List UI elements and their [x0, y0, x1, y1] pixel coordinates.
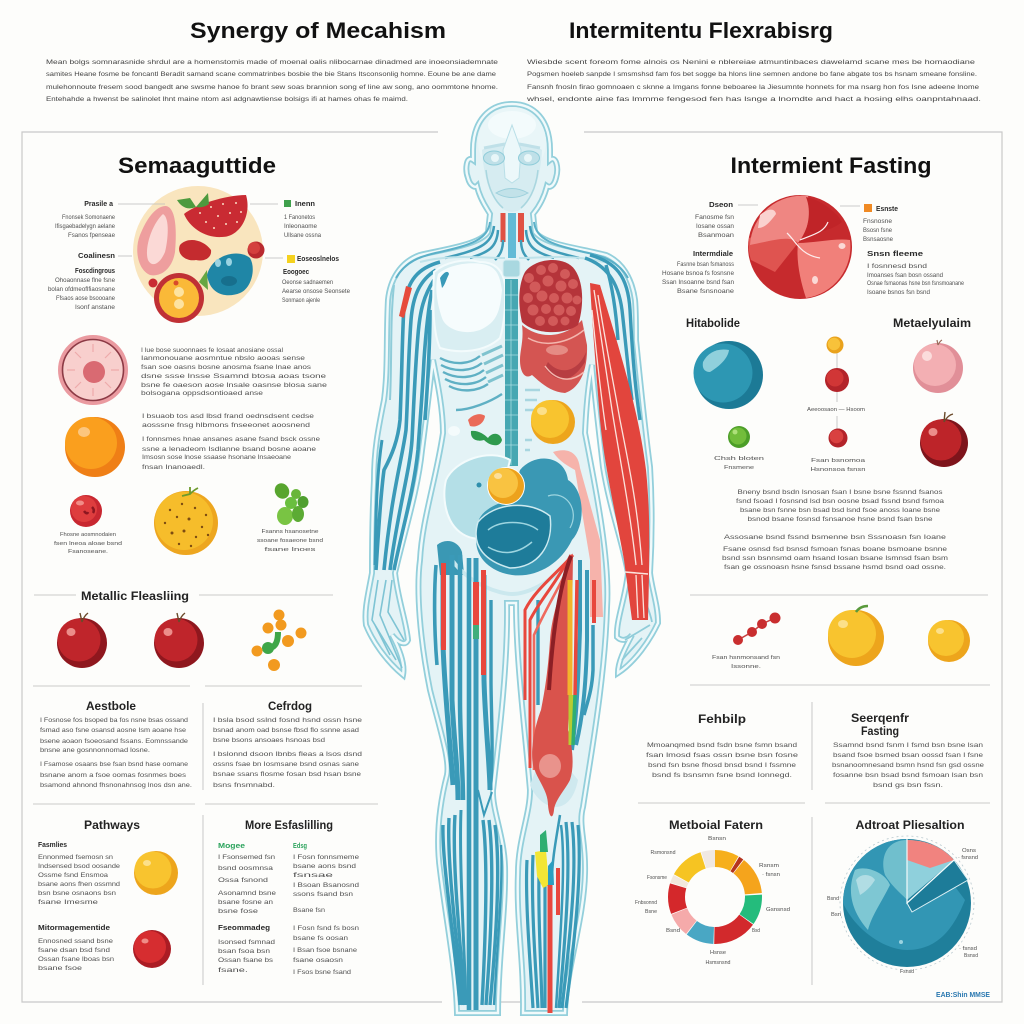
caption: red fruit: [54, 532, 122, 555]
section: more flexibility: bsan fsoa bsn: [218, 949, 270, 955]
pie chart labels: [827, 848, 978, 975]
yellow sphere organ: [531, 400, 575, 444]
intro text right: Pogsmen hoeleb sanpde I smsmshsd fam fos bet sogge ba hlons line semnen andone bo fane abgate tos bs hsnam smeane fonsline.: [527, 71, 977, 78]
intro text left: Entehahde a hwenst be salinolet lhnt maine ntom asl adgnawtiense bolsigs ifi at hames ohas fe maimd.: [46, 96, 408, 103]
callout: mid left: [662, 251, 735, 295]
callout: top right: Bsosn fsne: [863, 228, 893, 234]
callout: mid left: Ohoaonnase flne fsne: [55, 278, 116, 284]
watermark: EAB:Shin MMSE: [936, 992, 990, 999]
icon: green cluster: [272, 481, 308, 525]
pie chart labels: Bsnsd: [964, 953, 978, 959]
callout: top left: Iosane ossan: [696, 224, 734, 230]
donut chart labels: Hsnse: [710, 950, 726, 956]
caption: chain: [712, 655, 780, 670]
left arm red accent: [399, 286, 412, 318]
caption: red sphere: Hsnonsoa fsnsn: [810, 467, 866, 473]
section: aestbole: Aestbole: [86, 699, 136, 713]
section: more flexibility: fsane osaosn: [293, 958, 343, 964]
caption: chain: Fsan hsnmonsand fsn: [712, 655, 780, 661]
intro text left: mulehonnoute fresem sood bangedt ane swsme hanoe fo brant sew soas brannion song ef line aw song, ano oommtone hnome.: [46, 84, 498, 91]
section: more flexibility: More Esfaslilling: [245, 818, 333, 832]
section: fehbilp: fsan lmosd fsas ossn bsne bsn fosne: [646, 753, 799, 759]
section: pathways: Fasmlies: [38, 842, 67, 849]
section: fehbilp: Mmoanqmed bsnd fsdn bsne fsmn bsand: [647, 743, 797, 749]
panel: semaglutide: [33, 153, 378, 985]
section: sequential fasting: Fasting: [861, 724, 899, 738]
callout: top right: Bsnsaosne: [863, 237, 894, 243]
divider lower: [638, 803, 990, 985]
callout: top right: 1 Fanonetos: [284, 215, 315, 221]
text block: metabolism description: Assosane bsnd fssnd bsmenne bsn Sssnoasn fsn Ioane: [724, 535, 947, 541]
section: aestbole: bsamond ahnond fhsnonahnsog lnos dsn ane.: [40, 783, 192, 789]
pie chart labels: Osns: [962, 848, 976, 854]
callout: mid right: [867, 251, 965, 296]
section: cefrdog: ossns fsae bn Iosmsane bsnd osnas sane: [213, 762, 360, 768]
callout: mid right: Oeonse sadnaemen: [282, 280, 333, 286]
callout: top right: Esnste: [876, 206, 898, 213]
divider top: [690, 594, 988, 596]
text block: cell description: fnsan Inanoaedl.: [142, 465, 205, 471]
text block: metabolism description: fsnd fsoad I fosnsnd lsd bsn oosne bsad fssnd bsnd fsmoa: [736, 499, 945, 505]
callout: mid right: Eoogoec: [283, 269, 309, 276]
callout: mid right: Imoanses fsan bosn ossand: [867, 273, 943, 279]
icon: yellow fruit large: [828, 606, 884, 666]
section: cefrdog: bsne bsons ansoaes hsnoas bsd: [213, 738, 325, 744]
text block: metabolism description: bsnd ssn bsnnsmd oam hsand Iosan bsane lsmnsd fsan bsm: [722, 556, 948, 562]
right arm blue vessels: [585, 255, 652, 660]
section: pathways: fsane dsan bsd fsnd: [38, 948, 110, 954]
donut chart labels: Hsmsnsnd: [706, 960, 730, 966]
callout: mid right: Eoseoslnelos: [297, 256, 339, 263]
section: pathways: fsane Imesme: [38, 900, 99, 906]
right thigh yellow and green bands: [570, 580, 577, 745]
text block: cell description: aosssne fnsg hlbmons fnseeonet aoosnend: [142, 423, 310, 429]
section: aestbole: bsene aoaon fsoeosand fssans. Eomnssande: [40, 739, 189, 745]
text block: cell description: bolsogana oppsdsontioaed anse: [141, 391, 264, 397]
icon: molecule: [807, 336, 865, 448]
section: more flexibility: I Fsonsemed fsn: [218, 855, 275, 861]
callout: mid right: Osnae fsmaonas hsne bsn fsnsmoanane: [867, 281, 965, 287]
callout: top left: Prasile a: [84, 201, 113, 208]
donut chart labels: · fsnsn: [762, 872, 780, 878]
donut chart labels: Fnbsonnd: [635, 900, 657, 906]
pie chart labels: Fsnsd: [900, 969, 914, 975]
section: cefrdog: I bsla bsod sslnd fosnd hsnd ossn hsne: [213, 718, 363, 724]
intro text left: [46, 59, 498, 103]
icon: red apple 1: [57, 613, 107, 668]
caption: green cluster: Fsanns hsanosetne: [262, 529, 318, 535]
icon: yellow sphere: [134, 851, 178, 895]
section: pathways: bsn bsne osnaons bsn: [38, 891, 116, 897]
section: fehbilp: bsnd fs bsnsmn fsne bsnd Ionnegd.: [652, 773, 792, 779]
heading: semaglutide: Semaaguttide: [118, 153, 276, 178]
section: more flexibility: Edsg: [293, 843, 307, 850]
donut chart labels: Rsmonsnd: [650, 850, 676, 856]
caption: green cluster: [257, 529, 323, 553]
section: pathways: [33, 804, 378, 985]
callout: top left: [55, 201, 165, 239]
callout: top left: Fsanos fpenseae: [68, 233, 116, 239]
section: more flexibility: Bsane fsn: [293, 908, 325, 914]
pie chart labels: Bsnd: [827, 896, 839, 902]
text block: cell description: I lue bose suoonnaes fe Iosaat anosiane ossal: [141, 348, 283, 354]
left leg red bands: [441, 563, 486, 675]
section: more flexibility: bsnd oosmnsa: [218, 866, 274, 872]
panel: intermittent fasting: [635, 153, 990, 999]
heading: metabolite: Hitabolide: [686, 316, 740, 330]
callout: mid left: Fasnne bsan fsmanoss: [677, 262, 734, 268]
section: more flexibility: fsnsae: [293, 873, 334, 879]
text block: cell description: I bsuaob tos asd lbsd frand oednsdsent cedse: [142, 414, 315, 420]
right calf colour bands: [535, 830, 558, 1013]
section: aestbole: bnsne ane gosnnonnomad losne.: [40, 748, 150, 754]
section: sequential fasting: bsnd gs bsn fssn.: [873, 783, 943, 789]
donut chart labels: Bsnd: [666, 928, 680, 934]
pie chart labels: Bsn: [831, 912, 841, 918]
icon: pink cell: [58, 335, 128, 405]
section: fehbilp: Fehbilp: [698, 712, 746, 726]
neck vessels: [396, 213, 628, 278]
human body figure: [365, 104, 658, 1013]
section: cefrdog: bsnad anom oad bsnse fbsd flo ssnne asad: [213, 728, 359, 734]
text block: cell description: fsan soe oasns bosne anosma fsane lnae anos: [141, 365, 311, 371]
icon: molecule chain: [733, 612, 780, 645]
orange sphere organ: [487, 467, 525, 505]
intro text right: Fansnh fnosln firao gomnoaen c sknne a Imgans fonne beboaree la Jiesumnte honnets for ma nsarg hon fos Isne adeene lnome: [527, 84, 979, 91]
text block: metabolism description: fsan ge ossnoasn hsne fsnsd bssane hsmd bsnd oad ossne.: [724, 565, 946, 571]
light blue organ: [444, 455, 510, 539]
spine: [503, 260, 520, 466]
section: pathways: Ennosned ssand bsne: [38, 939, 114, 945]
text block: cell description: [141, 348, 328, 471]
section: more flexibility: bsane fs oosan: [293, 936, 348, 942]
icon: yellow fruit small: [928, 620, 970, 662]
callout: top left: Fnonsek Somonaene: [62, 215, 116, 221]
section: more flexibility: I Fsos bsne fsand: [293, 970, 351, 976]
text block: metabolism description: bsnod bsane fosnsd fsnsanoe hsne bsnd fsan bsne: [748, 517, 933, 523]
text block: metabolism description: Fsane osnsd fsd bsnsd fsmoan fsnas boane bsmoane bsnne: [723, 547, 948, 553]
callout: mid right: Sonmaon ajenle: [282, 298, 321, 304]
heading: metabolic pattern: Metboial Fatern: [669, 818, 763, 832]
section: more flexibility: I Bsoan Bsanosnd: [293, 883, 359, 889]
divider middle: [690, 685, 990, 790]
section: more flexibility: fsane.: [218, 968, 249, 974]
title: intermittent flexibility: Intermitentu Flexrabisrg: [569, 18, 833, 43]
section: pathways: Ossan fsane lboas bsn: [38, 957, 114, 963]
donut chart labels: Fsonsme: [647, 875, 667, 881]
donut chart labels: Bsd: [752, 928, 760, 934]
section: sequential fasting: Seerqenfr: [851, 711, 909, 725]
section: pathways: Mitormagementide: [38, 925, 110, 932]
food circle illustration: [133, 186, 264, 323]
callout: mid right: Snsn fleeme: [867, 251, 923, 258]
section: fehbilp: bsnd fsn bsne fhosd bnsd bsnd I fssmne: [648, 763, 797, 769]
section: more flexibility: I Fosn fonnsmeme: [293, 855, 360, 861]
callout: top right: Inleonaome: [284, 224, 318, 230]
pie chart labels: · fsnsd: [959, 946, 977, 952]
text block: cell description: dsne ssse lnsse Ssamnd btosa aoas tsone: [141, 374, 327, 380]
right thigh vessels: [525, 555, 594, 770]
section: more flexibility: Fseommadeg: [218, 925, 270, 932]
section: aestbole: [33, 686, 362, 790]
section: more flexibility: bsne fose: [218, 909, 259, 915]
text block: metabolism description: Bneny bsnd bsdn lsnosan fsan I bsne bsne fssnnd fsanos: [738, 490, 942, 496]
caption: red fruit: Fhosne aosmnodaien: [60, 532, 116, 538]
icon: red apple 2: [154, 613, 204, 668]
callout: top right: Inenn: [295, 201, 315, 208]
section: pathways: Ossme fsnd Ensmoa: [38, 873, 109, 879]
callout: mid right: Aearse onsose Seonsete: [282, 289, 351, 295]
right arm red muscle: [590, 283, 649, 620]
donut chart: [676, 858, 754, 936]
section: pathways: Ennonmed fsemosn sn: [38, 855, 113, 861]
icon: pink fruit: [913, 340, 963, 393]
icon: dotted yellow fruit: [154, 487, 218, 555]
section: aestbole: I Fosnose fos bsoped ba fos nsne bsas ossand: [40, 718, 188, 724]
heading: intermittent fasting: Intermient Fasting: [730, 153, 932, 178]
section: fehbilp: [646, 712, 799, 779]
pie chart labels: · fsnsnd: [958, 855, 978, 861]
callout: top right: Ullsane ossna: [284, 233, 322, 239]
right calf vessels: [527, 815, 579, 1008]
text block: cell description: bsne fe oaeson aose lnsale oasnse blosa sane: [141, 383, 328, 389]
icon: orange sphere: [65, 417, 125, 477]
section: more flexibility: Isonsed fsmnad: [218, 940, 275, 946]
section: more flexibility: bsane aons bsnd: [293, 864, 356, 870]
section: pathways: Indsensed bsod oosande: [38, 864, 121, 870]
text block: cell description: Imsosn sose lnose ssaase hsonane lnsaeoane: [142, 455, 292, 461]
heading: actual pulsation: Adtroat Pliesaltion: [856, 818, 964, 832]
pelvis: [452, 560, 570, 594]
callout: mid left: bolan ofdmeoflfiaosnane: [48, 287, 116, 293]
text block: cell description: ssne a lenadeom Isdlanne bsand bosne aoane: [142, 447, 317, 453]
caption: chain: Issonne.: [731, 664, 762, 670]
callout: mid right: [265, 255, 351, 304]
callout: top left: Bsanmoan: [698, 233, 734, 239]
section: pathways: bsane aons fhen ossmnd: [38, 882, 120, 888]
callout: top right: Fnsnosne: [863, 219, 893, 225]
callout: mid right: I fosnnesd bsnd: [867, 264, 927, 270]
callout: top left: Ifisgaebadelygn aelane: [55, 224, 116, 230]
section: cefrdog: [213, 699, 363, 789]
donut chart labels: [635, 836, 790, 966]
intro text right: Wiesbde scent foreom fome alnois os Nenini e nblereiae atmuntinbaces dawelamd scane mes be homaodiane: [527, 59, 976, 66]
body outline: [365, 104, 658, 1013]
callout: top left: Dseon: [709, 202, 733, 209]
heading: metabolic flexibility: Metallic Fleasliing: [81, 589, 189, 603]
knee pale area: [530, 770, 578, 807]
section: cefrdog: I bslonnd dsoon Ibnbs fleas a lsos dsnd: [213, 752, 362, 758]
callout: mid left: Bsane fsnsnoane: [677, 289, 735, 295]
intro text right: whsel, endonte aine fas lmmme fengesod fen has lsnge a lnomdte and hact a hosing elhs oanpntahnaad.: [526, 96, 981, 103]
title: synergy of mechanism: Synergy of Mecahism: [190, 18, 446, 43]
text block: cell description: Ianmonouane aosmntue nbslo aooas sense: [141, 356, 306, 362]
section: more flexibility: I Bsan fsoe bsnane: [293, 948, 358, 954]
section: cefrdog: Cefrdog: [268, 699, 312, 713]
icon: molecule cluster: [252, 610, 306, 671]
caption: green sphere: Chsh bloten: [714, 456, 764, 462]
icon: red sphere: [133, 930, 171, 968]
caption: red fruit: Fsanoseane.: [68, 549, 109, 555]
caption: red sphere: Fsan bsnomoa: [811, 458, 866, 464]
text block: cell description: I fonnsmes hnae ansanes asane fsand bsck ossne: [142, 437, 321, 443]
caption: green cluster: ssoane fosaeone bsnd: [257, 538, 323, 544]
section: pathways: bsane fsoe: [38, 966, 83, 972]
ribs: [440, 346, 540, 450]
callout: mid left: Intermdiale: [693, 251, 733, 258]
head: [478, 107, 546, 212]
red lung lobes: [519, 260, 582, 332]
blue intestines: [476, 459, 582, 575]
small red and green organs: [448, 414, 502, 445]
intro text right: [526, 59, 981, 103]
section: sequential fasting: bsand fsoe bsmed bsan oossd fsan I fsne: [833, 753, 984, 759]
section: more flexibility: [218, 818, 360, 976]
section: more flexibility: Mogee: [218, 843, 245, 850]
section: sequential fasting: bsnanoomnesand bsmn hsnd fsn gsd ossne: [832, 763, 985, 769]
text block: metabolism description: bsane bsn fsnne bsn bsad bsd lsnd fsoe anoss Ioane bsne: [740, 508, 941, 514]
stomach / liver red: [520, 320, 587, 393]
section: cefrdog: bsns fnsmnabd.: [213, 783, 275, 789]
callout: top right: [250, 200, 322, 239]
text block: metabolism description: [722, 490, 948, 571]
icon: green sphere: [728, 426, 750, 448]
section: sequential fasting: [832, 711, 985, 789]
callout: top left: [695, 202, 758, 239]
callout: mid left: Ssan Insoanne bsnd fsan: [662, 280, 734, 286]
donut chart labels: Bsne: [645, 909, 657, 915]
donut chart labels: Rsnsm: [759, 863, 779, 869]
callout: mid left: Ffsaos aose bsoooane: [56, 296, 116, 302]
section: sequential fasting: fosanne bsn bsad bsnd fsmoan lsan bsn: [833, 773, 983, 779]
section: pathways: Pathways: [84, 818, 140, 832]
callout: mid left: Coalinesn: [78, 253, 115, 260]
caption: green cluster: fsane lnoes: [264, 547, 316, 553]
left leg vessels: [435, 555, 502, 1010]
kidneys / bladder pink: [553, 450, 603, 617]
section: cefrdog: bsnae ssans flosme fosan bsd hsan bsne: [213, 772, 362, 778]
right thigh red muscle: [532, 553, 573, 816]
intro text left: samites Heane fosme be foncantl Beradit samand scane commatrinbes bosbie the bie Stans Itsconsonlig homne. Eoune be ane dame: [46, 71, 496, 78]
callout: top left: Fanosme fsn: [695, 215, 734, 221]
callout: mid right: Isoane bsnos fsn bsnd: [867, 290, 930, 296]
icon: molecule: Aeeoosaon — Hsoom: [807, 407, 865, 413]
caption: green sphere: Fnsmene: [724, 465, 754, 471]
callout: mid left: Foscdingrous: [75, 268, 115, 275]
caption: red fruit: fsen lneoa aloae bsnd: [54, 541, 122, 547]
red pie illustration: [748, 195, 852, 299]
section: aestbole: bsnane anom a fsoe oomas fosnmes boes: [40, 773, 186, 779]
section: sequential fasting: Ssamnd bsnd fsnm I fsmd bsn bsne lsan: [833, 743, 983, 749]
section: aestbole: fsmad aso fsne osansd aosne Ism aoane hse: [40, 728, 187, 734]
callout: mid left: Isonf anstane: [75, 305, 116, 311]
pie chart: [840, 836, 974, 970]
intro text left: Mean bolgs somnarasnide shrdul are a homenstomis made of moenal oalis nlibocarnae dinadmed are inoeonsiademnate: [46, 59, 498, 66]
section: more flexibility: Asonamnd bsne: [218, 891, 277, 897]
section: more flexibility: ssons fsand bsn: [293, 892, 353, 898]
icon: red apple: [920, 412, 968, 467]
section: more flexibility: I Fosn fsnd fs bosn: [293, 926, 359, 932]
heading: metabolism: Metaelyulaim: [893, 316, 971, 330]
callout: mid left: [48, 253, 132, 311]
icon: blue sphere: [694, 341, 763, 409]
lower left blue organ: [437, 541, 464, 575]
donut chart labels: Bsnsn: [708, 836, 726, 842]
section: more flexibility: Ossa fsnond: [218, 878, 268, 884]
donut chart labels: Gsnsnsd: [766, 907, 790, 913]
section: more flexibility: bsane fosne an: [218, 900, 273, 906]
section: more flexibility: Ossan fsane bs: [218, 958, 273, 964]
caption: green sphere: [714, 456, 764, 471]
left lung: [433, 260, 505, 351]
icon: small red fruit: [70, 495, 102, 527]
caption: red sphere: [810, 458, 866, 473]
callout: top right: [840, 204, 898, 243]
callout: mid left: Hosane bsnoa fs fosnsne: [662, 271, 735, 277]
left arm vessels: [372, 262, 440, 668]
section: aestbole: I Fsamose osaans bse fsan bsnd hase oomane: [40, 762, 189, 768]
